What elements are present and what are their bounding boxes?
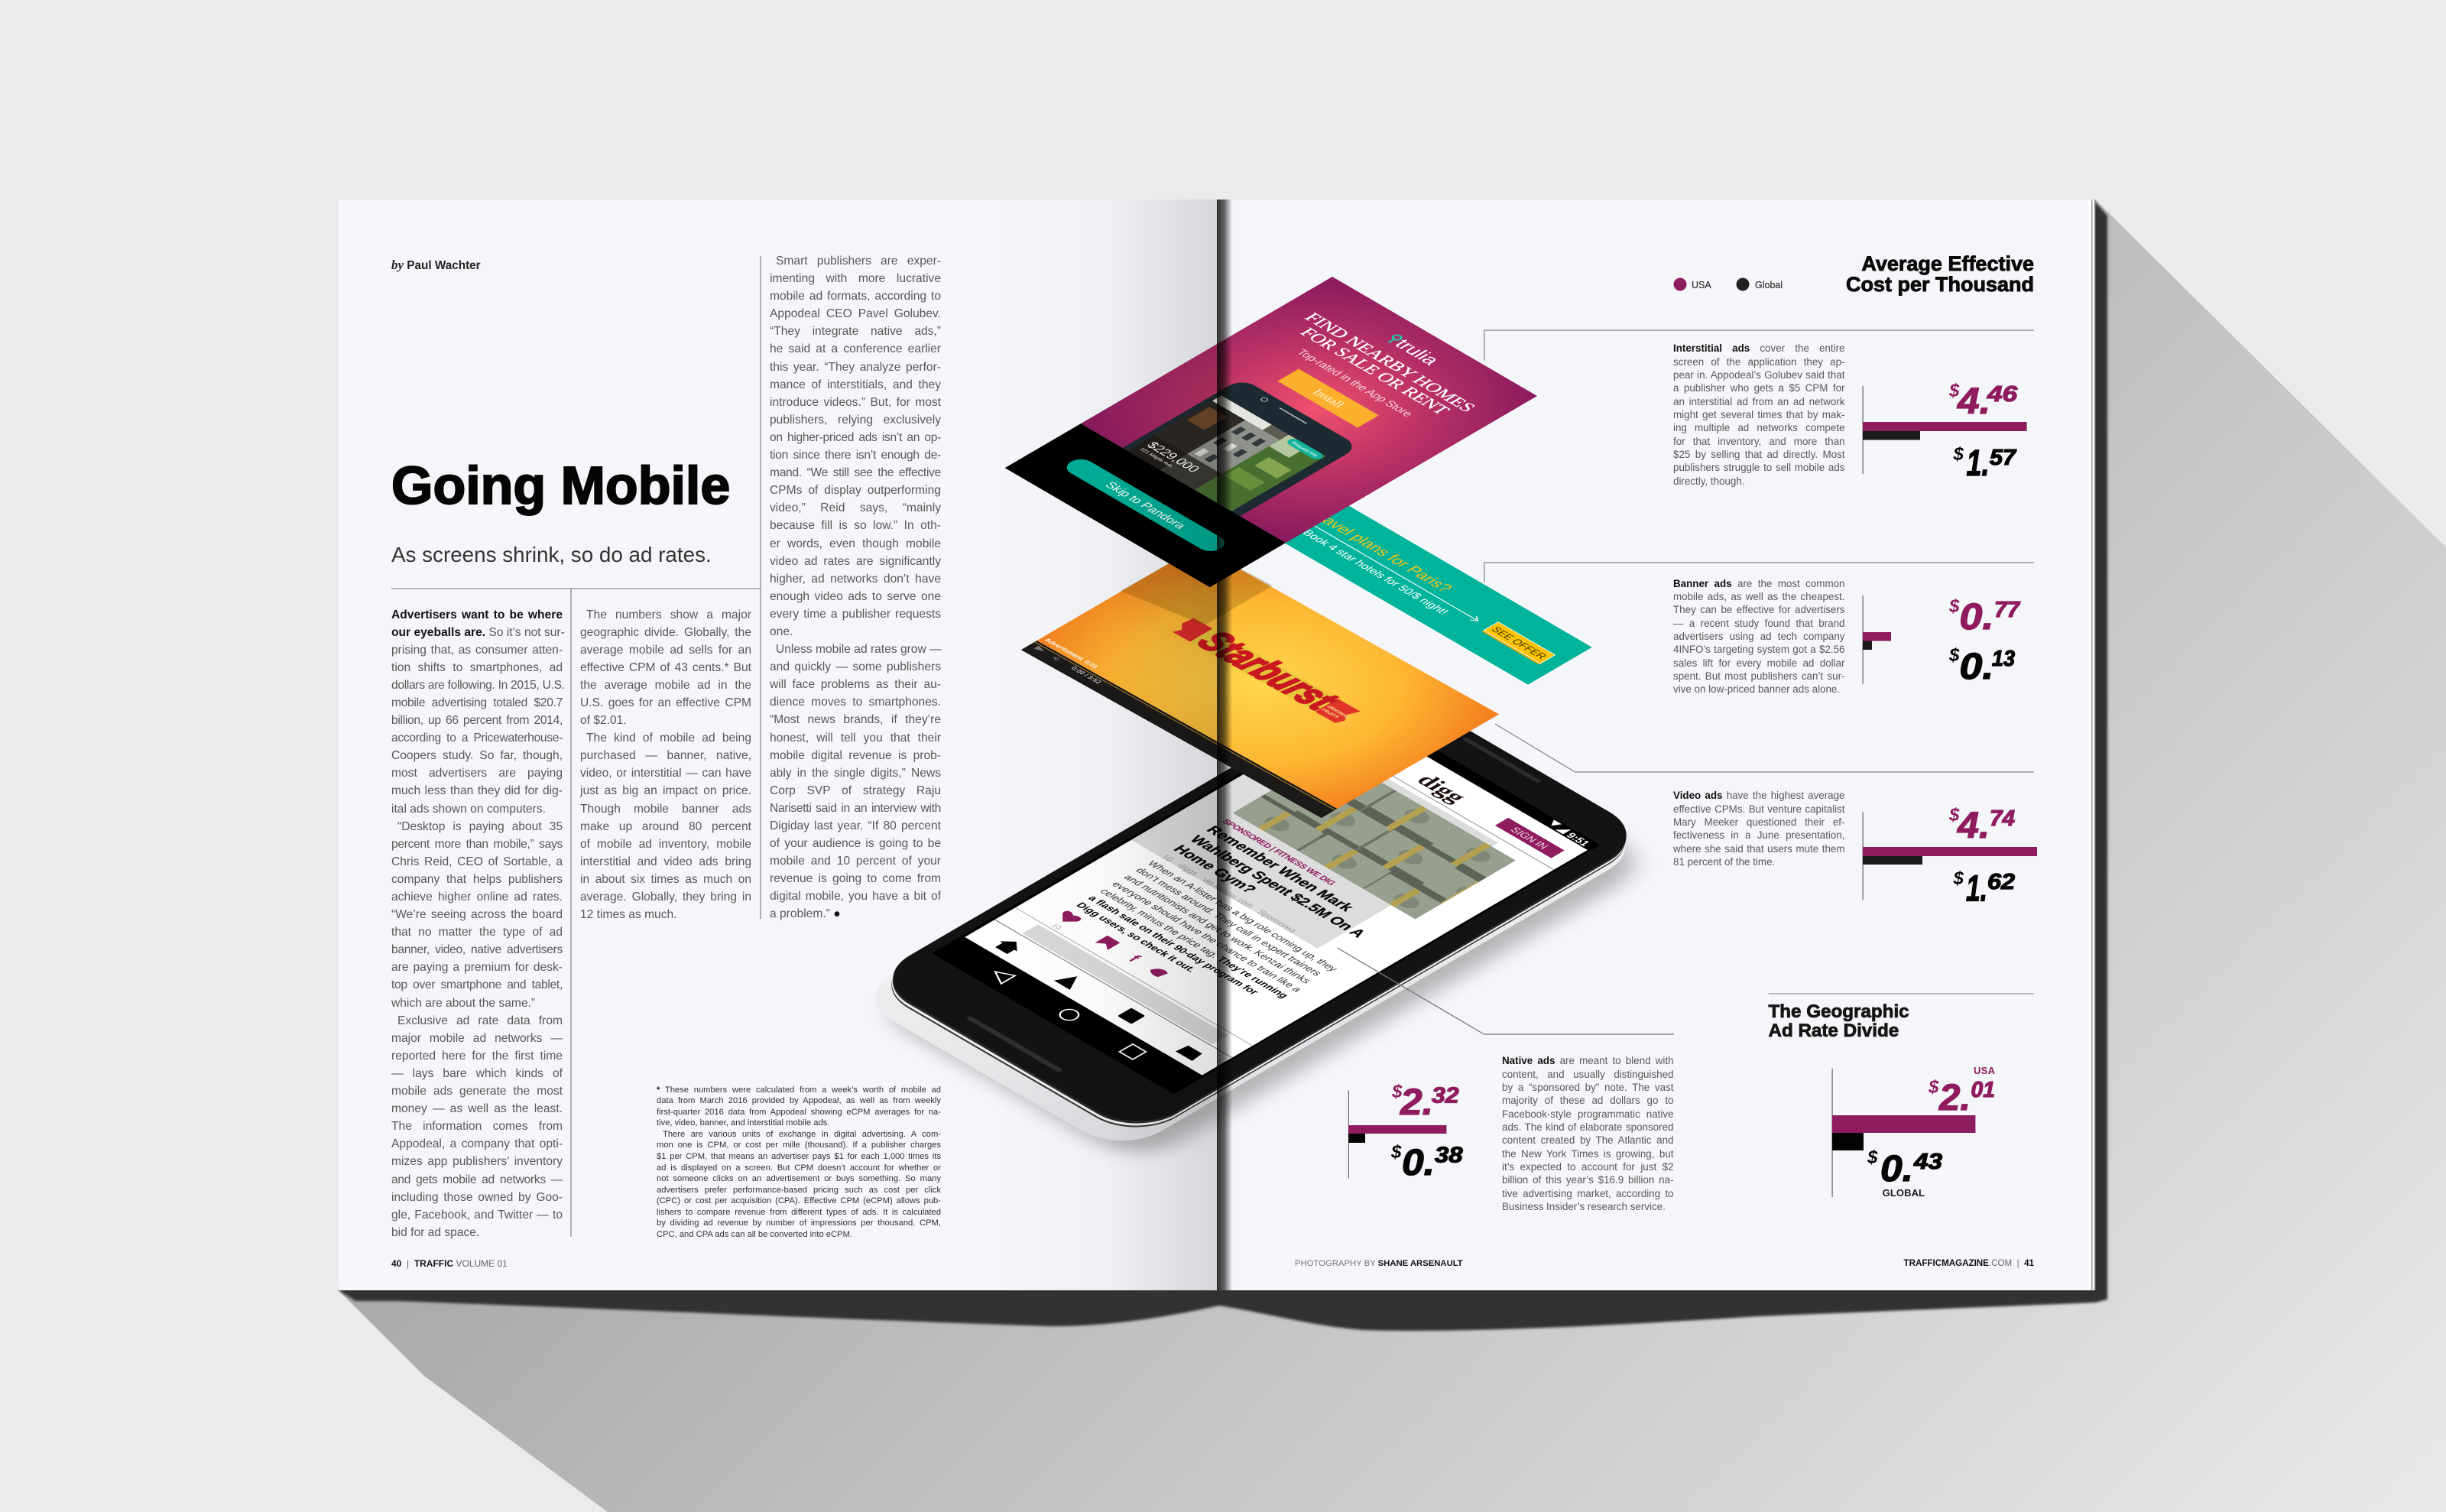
- text: native ads: content, and usually distinguished: [1502, 1069, 1674, 1080]
- body column 1: Coopers study. So far, though,: [391, 749, 563, 762]
- value: USA 0.77: $: [1948, 596, 1960, 617]
- candy wrapper: ORIGINAL: [1325, 705, 1351, 719]
- chart heading: geographic divide: [1768, 1001, 1909, 1041]
- chart heading: average effective cost: [1846, 252, 2034, 296]
- value: global 0.13: $: [1948, 645, 1960, 666]
- ad tagline: Top-rated in the App Store: [1293, 348, 1416, 419]
- body column 3: one.: [770, 625, 793, 638]
- text: native ads: Facebook-style programmatic native: [1502, 1108, 1674, 1120]
- video player bar: [1021, 641, 1338, 818]
- left page footer: 40 | TRAFFIC VOLUME 01: [391, 1258, 508, 1269]
- text: banner ads: vive on low-priced banner ads alone.: [1673, 683, 1840, 695]
- magazine page spread: [339, 200, 2088, 1290]
- sign in button: SIGN IN: [1508, 826, 1551, 851]
- body column 1: tion shifts to smartphones, ad: [391, 661, 563, 674]
- body column 1: bid for ad space.: [391, 1226, 479, 1239]
- body column 1: Appodeal, a company that opti-: [391, 1137, 563, 1150]
- sponsored label: SPONSORED | FITNESS WE DIG: [1220, 819, 1338, 887]
- text: video ads: Video ads have the highest average: [1673, 790, 1845, 801]
- body column 1: mobile advertising totaled $20.7: [391, 696, 563, 709]
- body column 1: that no matter the type of ad: [391, 926, 563, 939]
- value: USA 2.01: 01: [1971, 1078, 1995, 1102]
- body column 3: because fill is so low.” In oth-: [770, 519, 941, 532]
- article headline: Wahlberg Spent $2.5M On A: [1186, 833, 1369, 940]
- footnote: mon one is CPM, or cost per mille (thousand). If a publisher charges: [657, 1140, 941, 1150]
- skip button: Skip to Pandora: [1101, 480, 1189, 530]
- body column 1: mizes app publishers’ inventory: [391, 1155, 563, 1168]
- body column 3: of your audience is going to be: [770, 837, 941, 850]
- body column 3: imenting with more lucrative: [770, 272, 941, 285]
- leader line: native: [1338, 948, 1674, 1034]
- ad timer: Advertisment 0:01: [1043, 637, 1101, 670]
- value: global 0.13: 0.: [1959, 647, 1993, 687]
- chart: native: [1348, 1082, 1463, 1183]
- body column 1: including those owned by Goo-: [391, 1191, 563, 1204]
- body column 2: average mobile ad sells for an: [580, 644, 751, 657]
- trulia logo: trulia: [1390, 336, 1444, 368]
- text: native ads: content created by The Atlantic and: [1502, 1134, 1674, 1146]
- body column 3: Corp SVP of strategy Raju: [770, 784, 941, 797]
- text: interstitial ads: screen of the application they ap-: [1673, 356, 1845, 368]
- right page footer: TRAFFICMAGAZINE.COM | 41: [1903, 1258, 2034, 1268]
- body column 2: geographic divide. Globally, the: [580, 626, 751, 639]
- article body: celebrity, minus the price tag. They’re running: [1098, 887, 1291, 1000]
- body column 1: company that helps publishers: [391, 873, 563, 886]
- body column 1: mobile ads generate the most: [391, 1085, 563, 1098]
- value: global 1.57: [1952, 443, 2017, 484]
- text: interstitial ads: pear in. Appodeal’s Golubev said that: [1673, 369, 1845, 381]
- ad headline: FIND NEARBY HOMES: [1301, 310, 1480, 414]
- banner headline: Travel plans for Paris?: [1306, 507, 1456, 595]
- body column 1: achieve higher online ad rates.: [391, 891, 563, 904]
- value: global 1.57: 1.: [1966, 443, 1989, 484]
- body column 3: mance of interstitials, and they: [770, 378, 941, 391]
- value: global 1.62: [1952, 868, 2015, 910]
- chart heading: average effective cost: Average Effective: [1861, 252, 2034, 275]
- footnote: There are various units of exchange in digital advertising. A com-: [663, 1130, 941, 1139]
- value: USA 4.74: 4.: [1957, 806, 1990, 846]
- body column 2: effective CPM of 43 cents.* But: [580, 661, 751, 674]
- body column 3: enough video ads to serve one: [770, 590, 941, 603]
- text: interstitial ads: $25 by selling that ad directly. Most: [1673, 449, 1845, 460]
- body column 1: reported here for the first time: [391, 1050, 563, 1063]
- text: interstitial ads: might get several times that by mak-: [1673, 409, 1845, 420]
- interstitial ad: Trulia: [1005, 277, 1537, 587]
- body column 3: will face problems as their au-: [770, 678, 941, 691]
- text: interstitial ads: publishers struggle to sell mobile ads: [1673, 462, 1845, 473]
- phone mock-up in ad: [1122, 382, 1351, 517]
- text: video ads: fectiveness in a June presentation,: [1673, 829, 1845, 841]
- install button: [1277, 368, 1379, 427]
- footnote: not someone clicks on an advertisement or buys something. So many: [657, 1174, 941, 1183]
- text: video ads: effective CPMs. But venture capitalist: [1673, 803, 1845, 815]
- body column 3: Unless mobile ad rates grow —: [776, 643, 942, 656]
- body column 3: mobile and 10 percent of your: [770, 855, 941, 868]
- see offer button: [1481, 622, 1555, 664]
- text: video ads: 81 percent of the time.: [1673, 856, 1775, 868]
- grey ad strip: [1022, 924, 1228, 1044]
- body column 2: just as big an impact on price.: [580, 784, 751, 797]
- body column 3: “Most news brands, if they’re: [770, 713, 941, 726]
- body column 1: according to a Pricewaterhouse-: [391, 732, 563, 745]
- subtitle: As screens shrink, so do ad rates.: [391, 543, 712, 566]
- chart: banner: [1862, 595, 2021, 687]
- phone face and screen content: [893, 731, 1627, 1121]
- text: banner ads: They can be effective for advertisers: [1673, 604, 1845, 615]
- illustration, rules and charts layer: [391, 200, 2037, 1290]
- body column 1: billion, up 66 percent from 2014,: [391, 714, 563, 727]
- body column 1: which are about the same.”: [391, 997, 535, 1010]
- body column 1: Exclusive ad rate data from: [397, 1014, 563, 1027]
- body column 2: Though mobile banner ads: [580, 803, 751, 816]
- body column 3: video ad rates are significantly: [770, 555, 941, 568]
- value: USA 4.46: [1948, 381, 2018, 422]
- body column 3: CPMs of display outperforming: [770, 484, 941, 497]
- value: global 0.38: 38: [1435, 1144, 1463, 1168]
- stacked page edges: [2088, 200, 2096, 1290]
- text: video ads: where she said that users mute them: [1673, 843, 1845, 855]
- value: global 1.62: 1.: [1966, 868, 1987, 910]
- value: USA 4.46: $: [1948, 381, 1960, 401]
- banner arrow: [1311, 524, 1481, 623]
- body column 2: The numbers show a major: [586, 608, 751, 621]
- article body: a flash sale on their 90-day program for: [1085, 894, 1262, 997]
- body column 3: honest, will tell you that their: [770, 732, 941, 745]
- toolbar icons: [993, 936, 1208, 1061]
- text: banner ads: mobile ads, as well as the cheapest.: [1673, 591, 1845, 602]
- value: USA 2.01: 2.: [1938, 1078, 1971, 1118]
- value: global 1.62: 62: [1987, 870, 2015, 894]
- body column 3: dience moves to smartphones.: [770, 696, 941, 709]
- request info pill: Request Info: [1290, 441, 1319, 458]
- candy wrapper: Starburst: [1188, 625, 1348, 716]
- text: banner ads: spent. But most publishers can’t sur-: [1673, 670, 1845, 682]
- body column 3: mand. “We still see the effective: [770, 466, 941, 479]
- footnote: tive, video, banner, and interstitial mobile ads.: [657, 1118, 829, 1128]
- chart heading: geographic divide: The Geographic: [1769, 1001, 1909, 1021]
- text: banner ads: — a recent study found that brand: [1673, 618, 1845, 629]
- value: USA 0.77: [1948, 596, 2021, 638]
- body column 3: a problem.” ●: [770, 907, 841, 920]
- body column 1: are paying a premium for desk-: [391, 961, 563, 974]
- body column 3: [770, 255, 942, 920]
- ad headline: FOR SALE OR RENT: [1296, 325, 1454, 417]
- article headline: Home Gym?: [1169, 843, 1260, 896]
- legend: [1674, 278, 1783, 290]
- chart: geographic divide: [1831, 1065, 1996, 1199]
- body column 3: introduce videos.” But, for most: [770, 396, 941, 409]
- body column 1: banner, video, native advertisers: [391, 943, 563, 956]
- geographic rule: [1769, 993, 2034, 994]
- value: USA 4.74: 74: [1990, 806, 2015, 831]
- body column 1: [391, 608, 565, 1239]
- dark contact shadow under and right of the book: [339, 202, 2107, 1331]
- body column 3: Digiday last year. “If 80 percent: [770, 819, 941, 832]
- text: video ads: [1673, 790, 1845, 868]
- article body: [1074, 859, 1341, 1014]
- value: USA 2.01: [1928, 1077, 1995, 1118]
- value: USA 4.74: $: [1948, 805, 1960, 826]
- body column 1: much less than they did for dig-: [391, 784, 563, 797]
- request info pill: [1287, 439, 1322, 459]
- body column 1: Advertisers want to be where: [391, 608, 563, 621]
- body column 3: mobile ad formats, according to: [770, 290, 941, 303]
- body column 2: 12 times as much.: [580, 908, 677, 921]
- text: native ads: it’s expected to account for just $2: [1502, 1161, 1674, 1173]
- banner sub-headline: Book 4 star hotels for 50/$ night!: [1299, 528, 1451, 617]
- value: global 0.38: $: [1390, 1142, 1402, 1163]
- body column 1: “Desktop is paying about 35: [397, 820, 563, 833]
- skip button: [1061, 456, 1230, 554]
- footnote: lishers to compare revenue from different types of ads. It is calculated: [657, 1208, 941, 1217]
- value: USA 2.32: 2.: [1400, 1082, 1433, 1123]
- share icons: 10: [1049, 923, 1063, 931]
- candy wrapper: FRUITY: [1320, 708, 1341, 719]
- headline panel: [1131, 735, 1498, 949]
- text: banner ads: [1673, 578, 1845, 695]
- body column 2: of $2.01.: [580, 714, 627, 727]
- article headline: Remember When Mark: [1202, 824, 1358, 913]
- phone drop shadow: [870, 707, 1656, 1166]
- listing price: 221 Maple Ave.: [1138, 447, 1175, 469]
- see offer button: SEE OFFER: [1489, 625, 1549, 660]
- install button: Install: [1309, 388, 1348, 410]
- title: Going Mobile: [391, 456, 730, 515]
- body column 2: purchased — banner, native,: [580, 749, 751, 762]
- body column 2: make up around 80 percent: [580, 820, 751, 833]
- text: native ads: billion of this year’s $16.9 billion na-: [1502, 1174, 1674, 1186]
- text: native ads: tive advertising market, according to: [1502, 1188, 1674, 1199]
- value: USA 4.74: [1948, 805, 2015, 846]
- value: global 0.38: [1390, 1142, 1463, 1183]
- chart heading: average effective cost: Cost per Thousand: [1846, 272, 2034, 295]
- text: native ads: ads. The kind of elaborate sponsored: [1502, 1121, 1674, 1133]
- text: interstitial ads: directly, though.: [1673, 475, 1745, 487]
- body column 3: publishers, relying exclusively: [770, 414, 941, 427]
- share icons: [1043, 910, 1173, 985]
- value: global 1.57: $: [1952, 444, 1964, 465]
- body column 3: mobile digital revenue is prob-: [770, 749, 941, 762]
- value: global 0.38: 0.: [1402, 1143, 1435, 1183]
- body column 3: revenue is going to come from: [770, 872, 941, 885]
- footnote: [657, 1085, 941, 1239]
- value: USA 4.46: 4.: [1957, 381, 1990, 422]
- leader line: banner: [1484, 563, 2034, 582]
- phone device body: [852, 689, 1649, 1154]
- text: interstitial ads: ing multiple ad networks compete: [1673, 422, 1845, 433]
- column dividers: [391, 256, 761, 1237]
- body column 1: The information comes from: [391, 1120, 563, 1133]
- body column 1: dollars are following. In 2015, U.S.: [391, 679, 565, 692]
- body column 3: digital mobile, you have a bit of: [770, 890, 941, 903]
- body column 2: interstitial and video ads bring: [580, 855, 751, 868]
- article body: Digg users, so check it out.: [1074, 900, 1199, 974]
- text: banner ads: Banner ads are the most common: [1673, 578, 1845, 589]
- value: global 1.62: $: [1952, 868, 1964, 889]
- body column 1: major mobile ad networks —: [391, 1032, 563, 1045]
- text: video ads: Mary Meeker questioned their ef-: [1673, 816, 1845, 828]
- text: native ads: Business Insider’s research service.: [1502, 1201, 1666, 1212]
- body column 1: ital ads shown on computers.: [391, 803, 546, 816]
- video player bar: 0:00 / 3:52: [1069, 666, 1104, 685]
- body column 2: [579, 608, 751, 921]
- text: native ads: by a “sponsored by” note. The vast: [1502, 1082, 1674, 1093]
- article body: don’t mess around. They call in expert trainers: [1134, 866, 1325, 978]
- long cast shadow: [339, 200, 2446, 1512]
- byline: by Paul Wachter: [391, 258, 481, 272]
- gutter shading on left page: [994, 200, 1217, 1290]
- footnote: CPC, and CPA ads can all be converted into eCPM.: [657, 1230, 852, 1239]
- body column 2: the average mobile ad in the: [580, 679, 751, 692]
- body column 3: tion since there isn’t enough de-: [770, 449, 941, 462]
- text: interstitial ads: for that inventory, and more than: [1673, 436, 1845, 447]
- value: USA 0.77: 0.: [1959, 597, 1993, 638]
- legend: Global: [1755, 280, 1783, 290]
- value: global 0.13: 13: [1992, 647, 2015, 671]
- body column 2: The kind of mobile ad being: [586, 732, 751, 745]
- body column 1: and gets mobile ad networks —: [391, 1173, 563, 1186]
- text: interstitial ads: [1673, 342, 1845, 487]
- sign in button: [1495, 818, 1565, 858]
- body column 3: Appodeal CEO Pavel Golubev.: [770, 307, 941, 320]
- share icons: f: [1124, 953, 1144, 965]
- value: global 0.43: [1867, 1147, 1942, 1189]
- banner ad: travel: [1231, 475, 1592, 685]
- value: global 0.43: $: [1867, 1147, 1878, 1168]
- status bar: [1544, 819, 1593, 848]
- shadow of upper ad on video frame: [1121, 547, 1273, 625]
- chart heading: geographic divide: Ad Rate Divide: [1769, 1020, 1899, 1041]
- body column 2: U.S. goes for an effective CPM: [580, 696, 751, 709]
- body column 3: higher, ad networks don’t have: [770, 573, 941, 586]
- article body: and nutritionists and get to work. Kenzai thinks: [1121, 873, 1314, 985]
- article body: everyone should have the chance to train like a: [1109, 880, 1305, 994]
- footnote: first-quarter 2016 data from Appodeal showing eCPM averages for na-: [657, 1108, 941, 1117]
- body column 2: of mobile ad inventory, mobile: [580, 838, 751, 851]
- USA label: USA: [1974, 1065, 1996, 1076]
- body column 2: video, or interstitial — can have: [580, 767, 751, 780]
- listing price: $229,000: [1144, 440, 1203, 475]
- value: global 0.13: [1948, 645, 2015, 687]
- value: USA 4.46: 46: [1987, 382, 2018, 407]
- house photo: [1127, 395, 1326, 511]
- text: interstitial ads: Interstitial ads cover the entire: [1673, 342, 1845, 354]
- text: banner ads: sales lift for every mobile ad dollar: [1673, 657, 1845, 669]
- video ad: Starburst: [1021, 546, 1499, 818]
- money photo: [1233, 781, 1516, 919]
- body column 3: this year. “They analyze perfor-: [770, 361, 941, 374]
- body column 1: prising that, as consumer atten-: [391, 644, 563, 657]
- body column 3: video,” Reid says, “mainly: [770, 501, 941, 514]
- body column 1: — lays bare which kinds of: [391, 1067, 563, 1080]
- body column 3: on higher-priced ads isn’t an op-: [770, 431, 941, 444]
- orange video frame: [1036, 546, 1499, 809]
- text: interstitial ads: an interstitial ad from an ad network: [1673, 396, 1845, 407]
- smartphone showing native ad: [876, 731, 1645, 1159]
- screen background: [965, 712, 1588, 1076]
- footnote: by dividing ad revenue by number of impressions per thousand. CPM,: [657, 1218, 941, 1228]
- footnote: advertisers prefer performance-based pricing such as cost per click: [657, 1186, 941, 1195]
- text: native ads: the New York Times is growing, but: [1502, 1148, 1674, 1160]
- value: USA 0.77: 77: [1994, 598, 2021, 622]
- value: global 1.57: 57: [1990, 446, 2017, 470]
- value: USA 2.01: $: [1928, 1077, 1939, 1098]
- article body: When an A-lister has a big role coming up, they: [1145, 859, 1341, 973]
- value: global 0.43: 0.: [1880, 1149, 1913, 1189]
- body column 1: money — as well as the least.: [391, 1102, 563, 1115]
- body column 1: most advertisers are paying: [391, 767, 563, 780]
- body column 3: and quickly — some publishers: [770, 660, 941, 673]
- text: native ads: [1502, 1055, 1674, 1212]
- status bar: 9:51: [1564, 831, 1593, 848]
- chart: interstitial: [1862, 381, 2027, 484]
- footnote: * These numbers were calculated from a week’s worth of mobile ad: [657, 1085, 941, 1095]
- text: banner ads: advertisers using ad tech company: [1673, 631, 1845, 642]
- body column 3: Narisetti said in an interview with: [770, 802, 941, 815]
- GLOBAL label: GLOBAL: [1883, 1187, 1925, 1199]
- body column 3: he said at a conference earlier: [770, 342, 941, 355]
- value: USA 2.32: $: [1391, 1082, 1403, 1102]
- body column 3: every time a publisher requests: [770, 608, 941, 621]
- android nav buttons: [988, 968, 1146, 1059]
- body column 2: in about six times as much on: [580, 873, 751, 886]
- footnote: $1 per CPM, that means an advertiser pays $1 for each 1,000 times its: [657, 1152, 941, 1161]
- body column 3: “They integrate native ads,”: [770, 325, 941, 338]
- digg logo: digg: [1411, 771, 1472, 806]
- value: USA 2.32: 32: [1432, 1084, 1459, 1108]
- video player bar: ◂): [1050, 655, 1062, 661]
- footnote: (CPC) or cost per acquisition (CPA). Effective CPM (eCPM) allows pub-: [657, 1196, 941, 1205]
- chart: video: [1862, 805, 2037, 910]
- article meta: 10 diggs vip.kenzai.com Sponsored: [1160, 853, 1298, 934]
- body column 3: Smart publishers are exper-: [776, 255, 941, 268]
- body column 1: Chris Reid, CEO of Sortable, a: [391, 855, 563, 868]
- footnote: ad is displayed on a screen. But CPM doesn’t account for whether or: [657, 1163, 941, 1173]
- body column 1: gle, Facebook, and Twitter — to: [391, 1209, 563, 1222]
- value: USA 2.32: [1391, 1082, 1459, 1123]
- legend: USA: [1692, 280, 1711, 290]
- text: native ads: majority of these ad dollars go to: [1502, 1095, 1674, 1106]
- spine shadow: [1217, 200, 1232, 1290]
- body column 2: average. Globally, they bring in: [580, 891, 751, 904]
- body column 1: “We’re seeing across the board: [391, 908, 563, 921]
- body column 1: our eyeballs are. So it’s not sur-: [391, 626, 565, 639]
- phone metal edge: [868, 682, 1650, 1140]
- text: native ads: Native ads are meant to blend with: [1502, 1055, 1674, 1066]
- text: banner ads: 4INFO’s targeting system got a $2.56: [1673, 644, 1845, 655]
- leader line: video: [1495, 724, 2034, 772]
- value: global 0.43: 43: [1913, 1150, 1942, 1174]
- footnote: data from March 2016 provided by Appodeal, as well as from weekly: [657, 1096, 941, 1105]
- photo credit: PHOTOGRAPHY BY SHANE ARSENAULT: [1295, 1259, 1463, 1268]
- body column 1: top over smartphone and tablet,: [391, 978, 563, 991]
- leader line: interstitial: [1484, 330, 2034, 361]
- body column 3: er words, even though mobile: [770, 537, 941, 550]
- body column 3: ably in the single digits,” News: [770, 767, 941, 780]
- text: interstitial ads: a publisher who gets a $5 CPM for: [1673, 382, 1845, 394]
- body column 1: percent more than mobile,” says: [391, 838, 563, 851]
